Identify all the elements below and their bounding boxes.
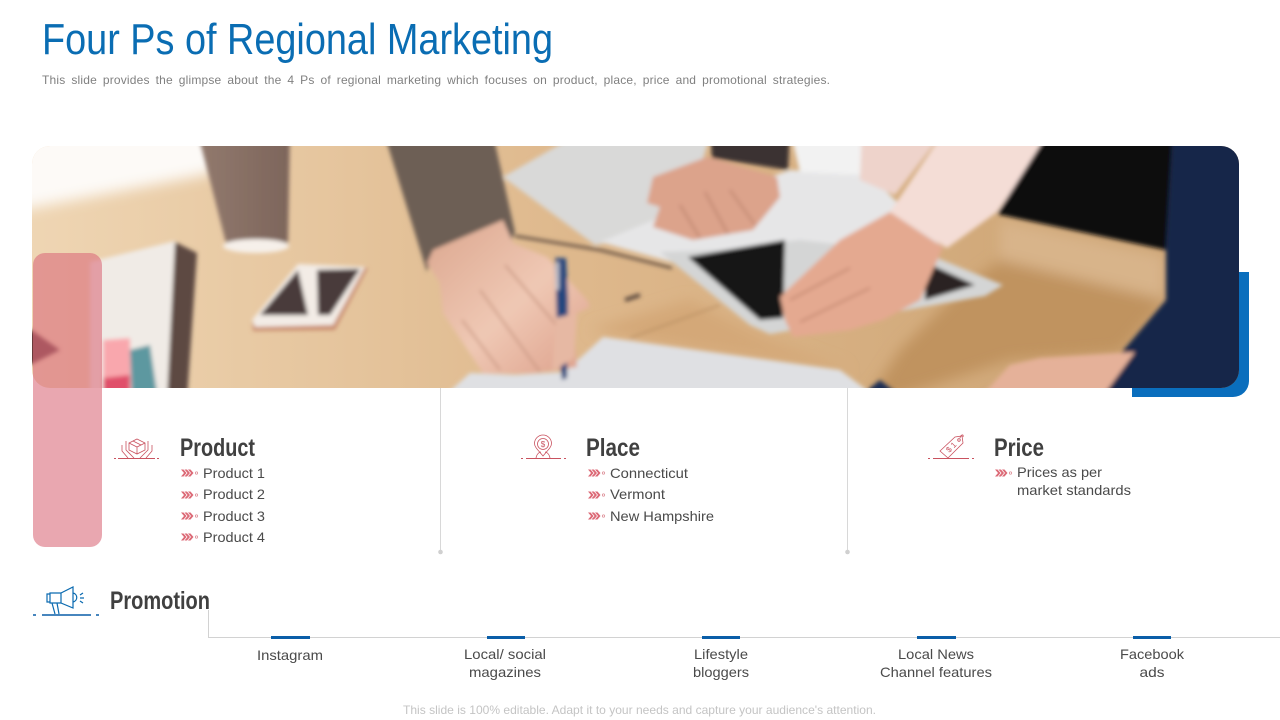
- right hand: [780, 212, 943, 337]
- label: Local/ social magazines: magazines: [469, 664, 541, 680]
- column dividers: [438, 388, 850, 554]
- icon: price tag: $ 1: [944, 440, 959, 454]
- label: Lifestyle bloggers: Lifestyle: [694, 646, 748, 662]
- heading: product: Product: [180, 434, 256, 462]
- text: price strategy: [995, 464, 1131, 498]
- list: places: Vermont: [610, 486, 665, 502]
- label: Instagram: Instagram: [257, 647, 323, 663]
- title: Four Ps of Regional Marketing: [42, 15, 553, 64]
- sleeve: [385, 146, 518, 272]
- notebook: [90, 241, 175, 400]
- list: products: [181, 465, 265, 545]
- subtitle: This slide provides the glimpse about the 4 Ps of regional marketing which focuses on product, place, price and promotional strategies.: [42, 73, 830, 87]
- list: places: New Hampshire: [610, 508, 714, 524]
- icon: location pin with dollar: $: [541, 440, 546, 449]
- list: places: Connecticut: [610, 465, 688, 481]
- coffee cup: [198, 146, 292, 245]
- label: Lifestyle bloggers: [693, 646, 749, 680]
- panel: price: [928, 434, 1131, 498]
- bottom paper: [450, 334, 870, 388]
- heading: place: Place: [586, 434, 640, 462]
- label: Facebook ads: ads: [1140, 664, 1164, 680]
- dark clothes: [997, 130, 1173, 250]
- lower hand: [988, 348, 1138, 388]
- label: Local News Channel features: Channel features: [880, 664, 992, 680]
- list: products: Product 3: [203, 508, 265, 524]
- pen: [555, 258, 568, 380]
- label: Local News Channel features: [880, 646, 992, 680]
- footer note: This slide is 100% editable. Adapt it to your needs and capture your audience's attention.: [403, 703, 876, 717]
- pink translucent bar: [33, 253, 102, 547]
- photo: hands working at a wooden desk: [32, 146, 1239, 388]
- icon: price tag: [928, 435, 974, 458]
- list: products: Product 1: [203, 465, 265, 481]
- label: Local/ social magazines: [464, 646, 546, 680]
- heading: price: Price: [994, 434, 1044, 462]
- phone: [252, 265, 368, 331]
- papers and tablet: [503, 130, 712, 245]
- list: products: Product 4: [203, 529, 265, 545]
- text: price strategy: market standards: [1017, 482, 1131, 498]
- promotion timeline: [208, 610, 1280, 639]
- list: products: Product 2: [203, 486, 265, 502]
- panel: product: [114, 434, 265, 545]
- label: Local/ social magazines: Local/ social: [464, 646, 546, 662]
- panel: promotion: [33, 587, 1280, 680]
- blue corner accent: [1132, 272, 1249, 397]
- upper hand: [647, 157, 780, 240]
- panel: place: [521, 434, 714, 524]
- label: Lifestyle bloggers: bloggers: [693, 664, 749, 680]
- icon: location pin with dollar: [521, 435, 566, 458]
- label: Facebook ads: Facebook: [1120, 646, 1185, 662]
- icon: hands holding box: [114, 439, 159, 458]
- heading: promotion: Promotion: [110, 587, 210, 615]
- hand with pen: [427, 220, 590, 373]
- icon: megaphone: [33, 587, 99, 615]
- label: Facebook ads: [1120, 646, 1185, 680]
- text: price strategy: Prices as per: [1017, 464, 1102, 480]
- shirt cuffs: [892, 146, 1046, 250]
- list: places: [588, 465, 714, 524]
- label: Local News Channel features: Local News: [898, 646, 974, 662]
